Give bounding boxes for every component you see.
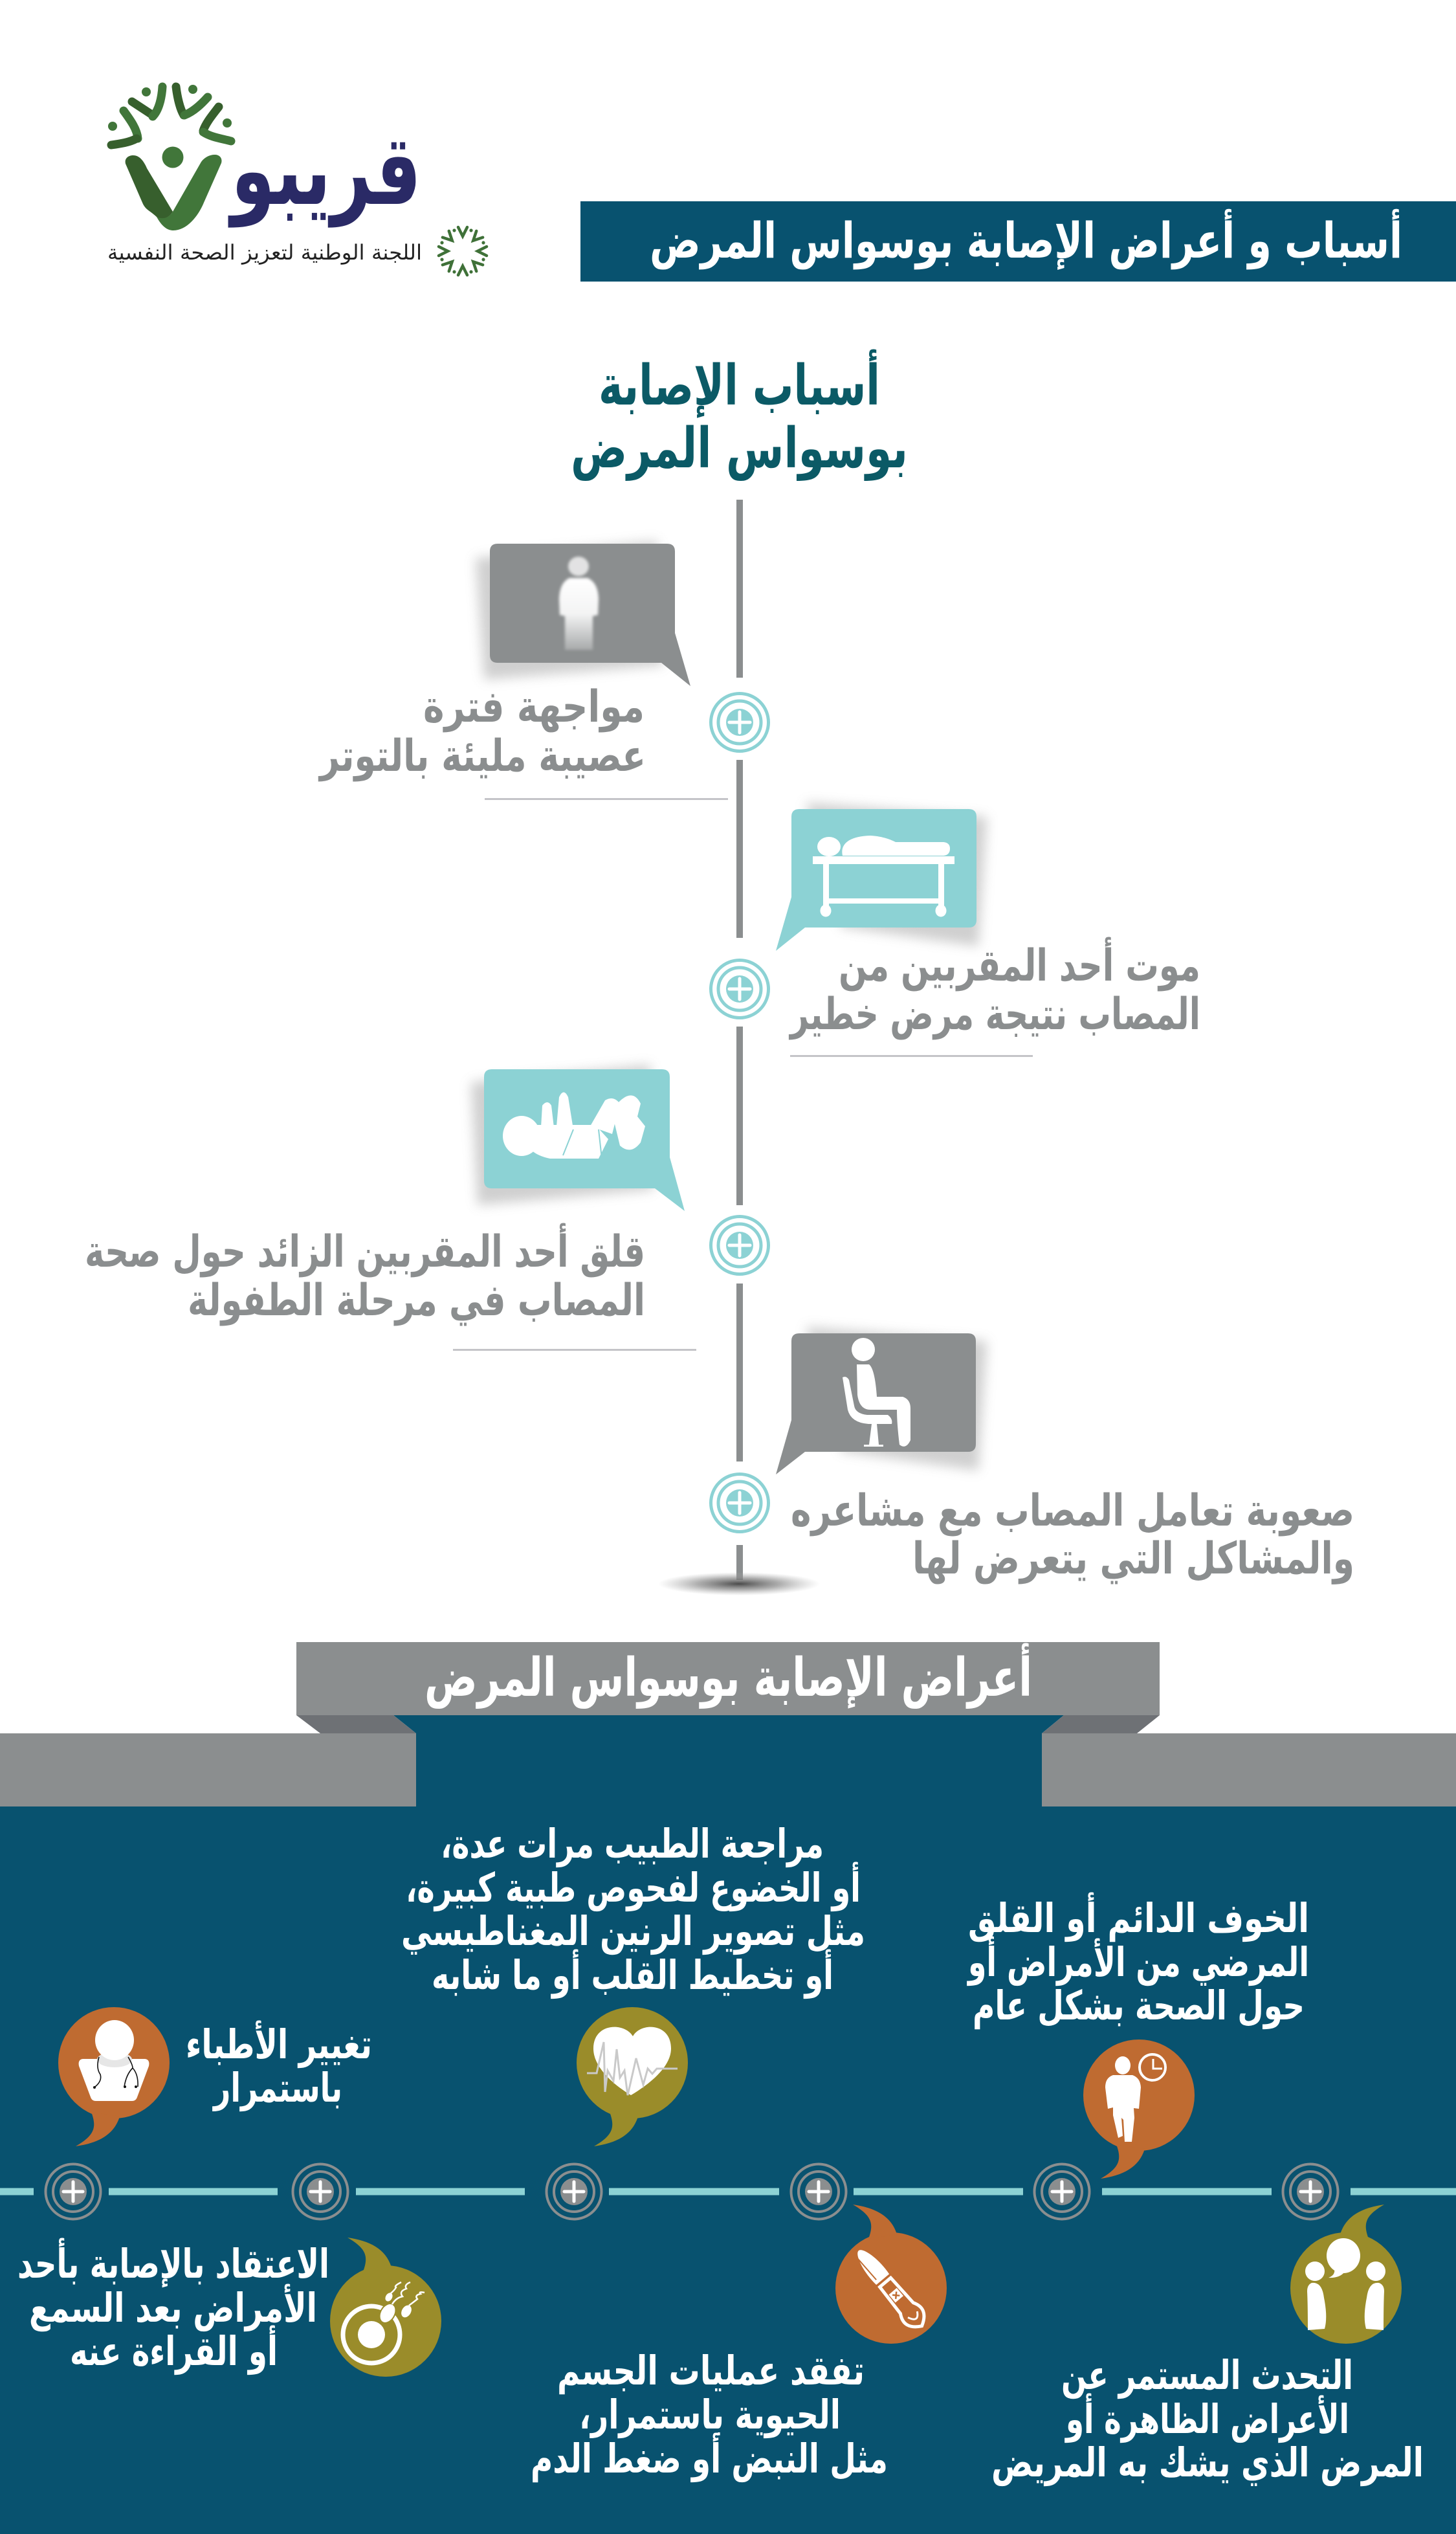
- text: الأعراض الظاهرة أو: [1064, 2393, 1349, 2443]
- text: موت أحد المقربين من: [839, 937, 1200, 992]
- heading: causes: [571, 349, 908, 481]
- icon: baby: [503, 1093, 645, 1159]
- logo subtitle: اللجنة الوطنية لتعزيز الصحة النفسية: [107, 240, 422, 265]
- text: أو تخطيط القلب أو ما شابه: [432, 1949, 833, 1999]
- icon: two people talking in olive bubble: [1290, 2205, 1402, 2344]
- text: مواجهة فترة: [423, 682, 645, 733]
- text: مثل تصوير الرنين المغناطيسي: [401, 1907, 865, 1955]
- text: [85, 1223, 645, 1326]
- cause 1: [318, 541, 728, 800]
- horizontal line: [0, 2188, 1456, 2195]
- text: المصاب نتيجة مرض خطير: [789, 989, 1200, 1040]
- cause 4: [776, 1327, 1354, 1584]
- speech bubble: teal: [776, 809, 976, 951]
- text: [531, 2347, 888, 2483]
- icon: heart in olive bubble: [577, 2007, 688, 2146]
- timeline marker 1: [711, 694, 769, 751]
- text: مراجعة الطبيب مرات عدة،: [441, 1820, 824, 1867]
- logo: [107, 85, 487, 275]
- text: عصيبة مليئة بالتوتر: [318, 731, 646, 782]
- symptoms banner: [296, 1642, 1160, 1715]
- text: [318, 682, 646, 782]
- marker 2: [292, 2164, 348, 2219]
- bubble shadow: [471, 1065, 654, 1205]
- bubble shadow: [806, 803, 987, 946]
- text: الأمراض بعد السمع: [29, 2284, 317, 2332]
- icon: egg and sperm in olive bubble: [330, 2238, 441, 2377]
- text: الحيوية باستمرار،: [579, 2391, 841, 2438]
- symptom: repeated doctor visits: [401, 1820, 865, 2146]
- marker 6: [1283, 2164, 1338, 2219]
- text: حول الصحة بشكل عام: [973, 1982, 1305, 2030]
- title bar: [580, 201, 1456, 282]
- marker 4: [791, 2164, 846, 2219]
- bubble shadow: [476, 541, 663, 680]
- causes timeline: [658, 500, 820, 1595]
- text: تفقد عمليات الجسم: [557, 2347, 865, 2394]
- symptom: belief of illness: [17, 2238, 441, 2377]
- symptom: body functions check: [531, 2205, 947, 2483]
- banner heading: أعراض الإصابة بوسواس المرض: [425, 1643, 1032, 1709]
- icon: bandage tube in orange bubble: [835, 2205, 947, 2344]
- icon: stressed person: [559, 557, 599, 650]
- text: تغيير الأطباء: [186, 2020, 372, 2068]
- text: [967, 1892, 1309, 2030]
- logo wordmark: قريبو: [228, 115, 421, 228]
- logo mark: green figures: [108, 85, 232, 230]
- marker 3: [546, 2164, 602, 2219]
- icon: person on hospital bed: [813, 836, 954, 917]
- text: باستمرار: [212, 2064, 342, 2111]
- cause 2: [776, 803, 1200, 1057]
- symptom: constant fear: [967, 1892, 1309, 2179]
- symptom: changing doctors: [58, 2007, 372, 2146]
- committee emblem: [439, 227, 487, 275]
- text: التحدث المستمر عن: [1061, 2351, 1353, 2399]
- text: أو الخضوع لفحوص طبية كبيرة،: [406, 1862, 861, 1912]
- timeline marker 4: [711, 1474, 769, 1531]
- text: الخوف الدائم أو القلق: [968, 1892, 1309, 1942]
- text: [791, 1485, 1354, 1584]
- heading: causes: بوسواس المرض: [571, 416, 908, 481]
- symptom: constant talking: [991, 2205, 1424, 2487]
- symptoms timeline: [0, 2164, 1456, 2219]
- speech bubble: grey: [490, 544, 690, 686]
- marker 1: [45, 2164, 101, 2219]
- text: قلق أحد المقربين الزائد حول صحة: [85, 1223, 645, 1278]
- text: المرضي من الأمراض أو: [967, 1936, 1309, 1986]
- text: الاعتقاد بالإصابة بأحد: [17, 2238, 329, 2287]
- timeline marker 3: [711, 1217, 769, 1274]
- timeline marker 2: [711, 961, 769, 1017]
- icon: person and clock in orange bubble: [1083, 2039, 1195, 2179]
- marker 5: [1034, 2164, 1090, 2219]
- icon: seated person: [843, 1338, 910, 1447]
- speech bubble: teal: [484, 1069, 685, 1211]
- timeline line: [736, 500, 743, 1580]
- icon: doctor in orange bubble: [58, 2007, 170, 2146]
- panel: symptoms background: [0, 1715, 1456, 2534]
- cause 3: [85, 1065, 696, 1351]
- bubble shadow: [806, 1327, 987, 1471]
- text: المصاب في مرحلة الطفولة: [188, 1275, 645, 1326]
- text: [789, 937, 1200, 1040]
- text: [991, 2351, 1424, 2487]
- text: أو القراءة عنه: [70, 2325, 278, 2375]
- heading: causes: أسباب الإصابة: [599, 349, 880, 419]
- text: [186, 2020, 372, 2111]
- text: [401, 1820, 865, 1999]
- timeline base shadow: [658, 1572, 820, 1595]
- speech bubble: grey: [776, 1333, 976, 1474]
- text: مثل النبض أو ضغط الدم: [531, 2432, 888, 2483]
- text: [17, 2238, 329, 2375]
